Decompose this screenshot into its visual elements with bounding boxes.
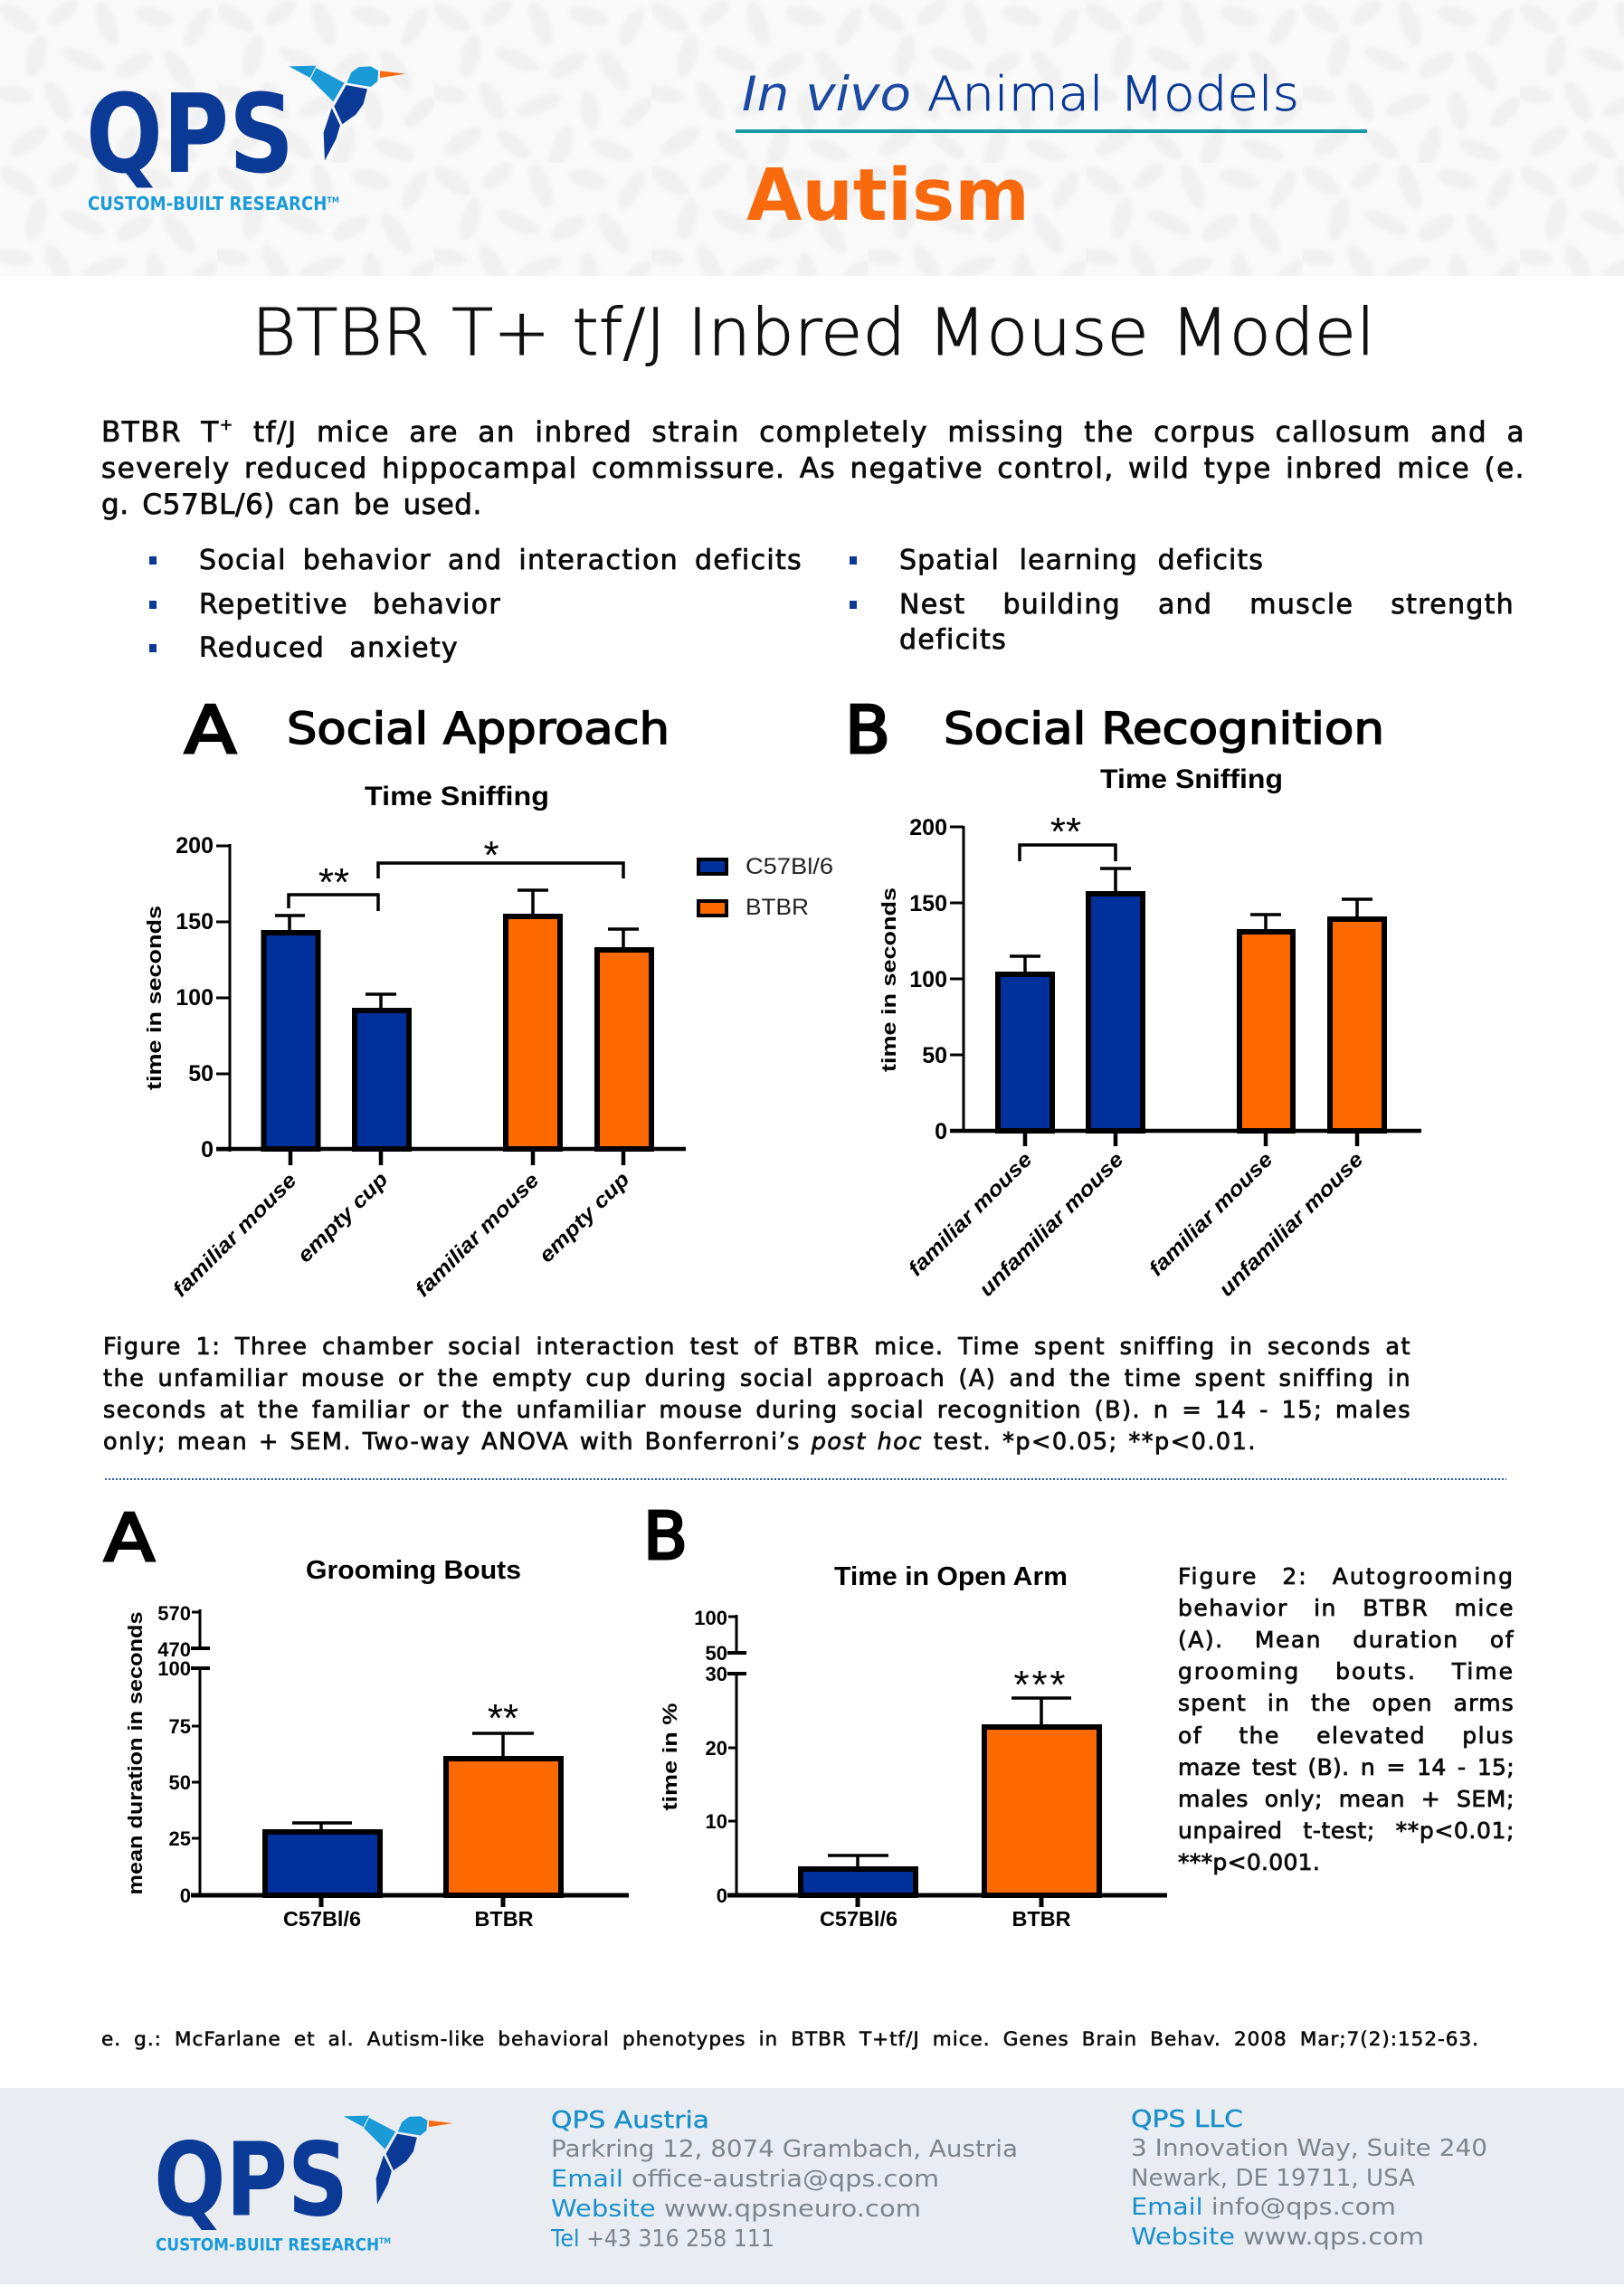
text: Figure 2: Autogrooming — [1178, 1563, 1515, 1590]
y axis ticks and numbers: 150 — [176, 909, 214, 935]
y axis with break: 0 — [717, 1884, 727, 1907]
panel heading: B Social Recognition: Social Recognition — [944, 704, 1384, 754]
significance brackets — [289, 833, 623, 911]
chart title: Grooming Bouts — [306, 1556, 521, 1585]
y axis with break: 570 — [157, 1602, 191, 1625]
x axis category labels: familiar mouse — [410, 1168, 544, 1301]
footer contact: QPS LLC: Newark, DE 19711, USA — [1131, 2165, 1415, 2192]
logo: QPS header: TM — [327, 196, 339, 205]
x axis category labels: empty cup — [534, 1167, 634, 1267]
logo: QPS header — [86, 66, 405, 214]
footer band — [0, 2088, 1624, 2284]
text: Repetitive behavior — [199, 589, 501, 621]
text: only; mean + SEM. Two-way ANOVA with Bonferroni’s post hoc test. *p<0.05; **p<0.01. — [103, 1428, 1257, 1456]
panel heading: B Social Recognition — [845, 692, 1384, 768]
text: behavior in BTBR mice — [1178, 1595, 1515, 1621]
error bars — [828, 1698, 1071, 1868]
y axis with break — [157, 1602, 210, 1907]
x axis category labels: familiar mouse — [1144, 1147, 1277, 1280]
x axis category labels — [167, 1167, 634, 1301]
bars — [265, 1759, 561, 1895]
y axis with break: 20 — [706, 1737, 727, 1760]
y axis with break: 100 — [157, 1657, 191, 1680]
chart: social approach bar chart — [143, 782, 833, 1301]
text: of the elevated plus — [1178, 1722, 1515, 1749]
significance: ** — [488, 1696, 518, 1741]
text: ***p<0.001. — [1178, 1849, 1320, 1875]
x axis labels: BTBR — [474, 1907, 534, 1931]
text: males only; mean + SEM; — [1178, 1786, 1515, 1812]
legend — [698, 854, 833, 920]
error bars — [1010, 868, 1372, 974]
footer contact: QPS Austria: Parkring 12, 8074 Grambach, Austria — [551, 2136, 1018, 2163]
panel letter B figure 2: B — [643, 1498, 688, 1574]
y axis ticks and numbers: 200 — [909, 815, 947, 840]
significance bracket: ** — [1050, 810, 1081, 854]
text: BTBR T+ tf/J mice are an inbred strain completely missing the corpus callosum and a — [101, 416, 1525, 449]
chart: grooming bouts — [124, 1556, 629, 1931]
panel heading: A Social Approach: Social Approach — [287, 704, 670, 754]
x axis labels: BTBR — [1011, 1907, 1071, 1931]
footer contact: QPS LLC: 3 Innovation Way, Suite 240 — [1131, 2135, 1487, 2162]
x axis category labels: familiar mouse — [167, 1168, 301, 1301]
y axis ticks and numbers: 100 — [909, 967, 947, 992]
y axis ticks and numbers: 200 — [176, 833, 214, 859]
significance: *** — [1013, 1663, 1066, 1707]
error bars — [292, 1733, 534, 1831]
y axis ticks and numbers: 100 — [176, 985, 214, 1011]
y axis label: time in % — [659, 1703, 681, 1811]
logo: QPS footer — [154, 2116, 452, 2255]
y axis ticks and numbers: 150 — [909, 891, 947, 916]
footer contact: QPS LLC: Website www.qps.com — [1131, 2224, 1424, 2251]
y axis with break: 0 — [180, 1884, 191, 1907]
text: Reduced anxiety — [199, 632, 459, 664]
x axis labels: C57Bl/6 — [283, 1907, 361, 1931]
x axis — [727, 1895, 1167, 1907]
logo: QPS footer: TM — [379, 2236, 391, 2245]
y axis label: mean duration in seconds — [124, 1612, 147, 1894]
panel heading: B Social Recognition: B — [845, 692, 890, 768]
logo: QPS footer: CUSTOM-BUILT RESEARCH — [156, 2236, 403, 2255]
y axis ticks and numbers: 50 — [922, 1043, 947, 1068]
footer contact: QPS Austria: Tel +43 316 258 111 — [550, 2225, 774, 2253]
y axis with break: 25 — [169, 1827, 191, 1850]
footer contact: QPS Austria: QPS Austria — [551, 2107, 709, 2134]
chart: social recognition bar chart — [878, 764, 1421, 1301]
x axis category labels: unfamiliar mouse — [1214, 1147, 1368, 1301]
text: grooming bouts. Time — [1178, 1658, 1515, 1684]
dotted divider — [105, 1478, 1506, 1480]
text: Nest building and muscle strength — [899, 589, 1515, 621]
heading rule — [736, 129, 1367, 133]
y axis label: time in seconds — [143, 906, 166, 1090]
text: seconds at the familiar or the unfamiliar mouse during social recognition (B). n = 14 - 15; males — [103, 1397, 1411, 1424]
text: the unfamiliar mouse or the empty cup during social approach (A) and the time spent sniffing in — [103, 1365, 1411, 1392]
y axis ticks and numbers: 50 — [188, 1061, 214, 1087]
y axis with break: 100 — [694, 1607, 727, 1629]
chart: time in open arm — [659, 1562, 1167, 1931]
heading: In vivo Animal Models: In vivo Animal Models — [742, 67, 1299, 122]
y axis ticks and numbers: 0 — [201, 1137, 214, 1162]
text: Spatial learning deficits — [899, 545, 1264, 576]
bullet list: right column — [899, 545, 1515, 656]
footer contact: QPS Austria — [550, 2107, 1018, 2253]
chart title: Time Sniffing — [1100, 764, 1283, 794]
y axis label: time in seconds — [878, 887, 900, 1072]
text: unpaired t-test; **p<0.01; — [1178, 1817, 1515, 1844]
y axis ticks and numbers — [909, 815, 964, 1144]
significance bracket — [1020, 810, 1116, 861]
bars — [998, 894, 1384, 1131]
x axis category labels: empty cup — [292, 1167, 393, 1267]
x axis category labels — [903, 1147, 1368, 1301]
text: maze test (B). n = 14 - 15; — [1178, 1754, 1515, 1780]
significance brackets: ** — [318, 860, 349, 905]
y axis with break: 50 — [169, 1771, 191, 1794]
x axis category labels: familiar mouse — [903, 1147, 1037, 1280]
y axis with break: 10 — [706, 1810, 727, 1833]
error bars — [275, 890, 639, 1010]
header background — [0, 0, 1624, 276]
y axis with break — [694, 1607, 746, 1907]
text: deficits — [899, 624, 1007, 656]
footer contact: QPS Austria: Email office-austria@qps.com — [551, 2166, 939, 2193]
panel letter A figure 2: A — [104, 1500, 155, 1576]
panel heading: A Social Approach — [185, 692, 670, 768]
logo: QPS footer: QPS — [154, 2121, 348, 2239]
x axis — [950, 1131, 1421, 1146]
footer contact: QPS LLC — [1131, 2106, 1487, 2251]
chart title: Time in Open Arm — [834, 1562, 1068, 1591]
x axis category labels: unfamiliar mouse — [974, 1147, 1128, 1301]
footer contact: QPS Austria: Website www.qpsneuro.com — [551, 2196, 921, 2223]
logo: QPS header: QPS — [86, 72, 294, 198]
footer contact: QPS LLC: QPS LLC — [1131, 2106, 1243, 2133]
x axis — [191, 1895, 629, 1907]
footer contact: QPS LLC: Email info@qps.com — [1131, 2194, 1396, 2221]
bars — [801, 1727, 1099, 1895]
figure 1 caption — [103, 1333, 1411, 1456]
text: g. C57BL/6) can be used. — [101, 489, 482, 521]
text: spent in the open arms — [1178, 1690, 1515, 1716]
bars — [264, 916, 651, 1149]
panel heading: A Social Approach: A — [185, 692, 236, 768]
y axis with break: 75 — [169, 1715, 191, 1738]
text: (A). Mean duration of — [1178, 1627, 1515, 1653]
y axis with break: 30 — [706, 1663, 727, 1685]
x axis labels: C57Bl/6 — [820, 1907, 897, 1931]
intro paragraph — [101, 416, 1525, 521]
text: Social behavior and interaction deficits — [199, 545, 803, 576]
y axis with break: 50 — [706, 1642, 727, 1665]
logo: QPS header: CUSTOM-BUILT RESEARCH — [88, 193, 353, 214]
text: Figure 1: Three chamber social interaction test of BTBR mice. Time spent sniffing in seconds at — [103, 1333, 1411, 1361]
legend: BTBR — [746, 895, 809, 920]
heading: Autism: Autism — [746, 154, 1030, 237]
bullet list: left column — [199, 545, 803, 664]
y axis with break: 470 — [157, 1638, 191, 1661]
y axis ticks and numbers — [176, 833, 230, 1162]
y axis ticks and numbers: 0 — [935, 1119, 947, 1144]
title: BTBR T+ tf/J Inbred Mouse Model — [252, 295, 1375, 370]
x axis labels — [283, 1907, 534, 1931]
significance brackets: * — [483, 833, 499, 878]
bullet markers — [149, 556, 857, 652]
text: severely reduced hippocampal commissure. As negative control, wild type inbred mice (e. — [101, 452, 1525, 485]
x axis — [216, 1149, 686, 1165]
figure 2 caption — [1178, 1563, 1515, 1875]
chart title: Time Sniffing — [365, 782, 549, 811]
x axis labels — [820, 1907, 1071, 1931]
legend: C57Bl/6 — [746, 854, 833, 879]
reference line: e. g.: McFarlane et al. Autism-like behavioral phenotypes in BTBR T+tf/J mice. Genes Brain Behav. 2008 Mar;7(2):152-63. — [101, 2028, 1479, 2051]
